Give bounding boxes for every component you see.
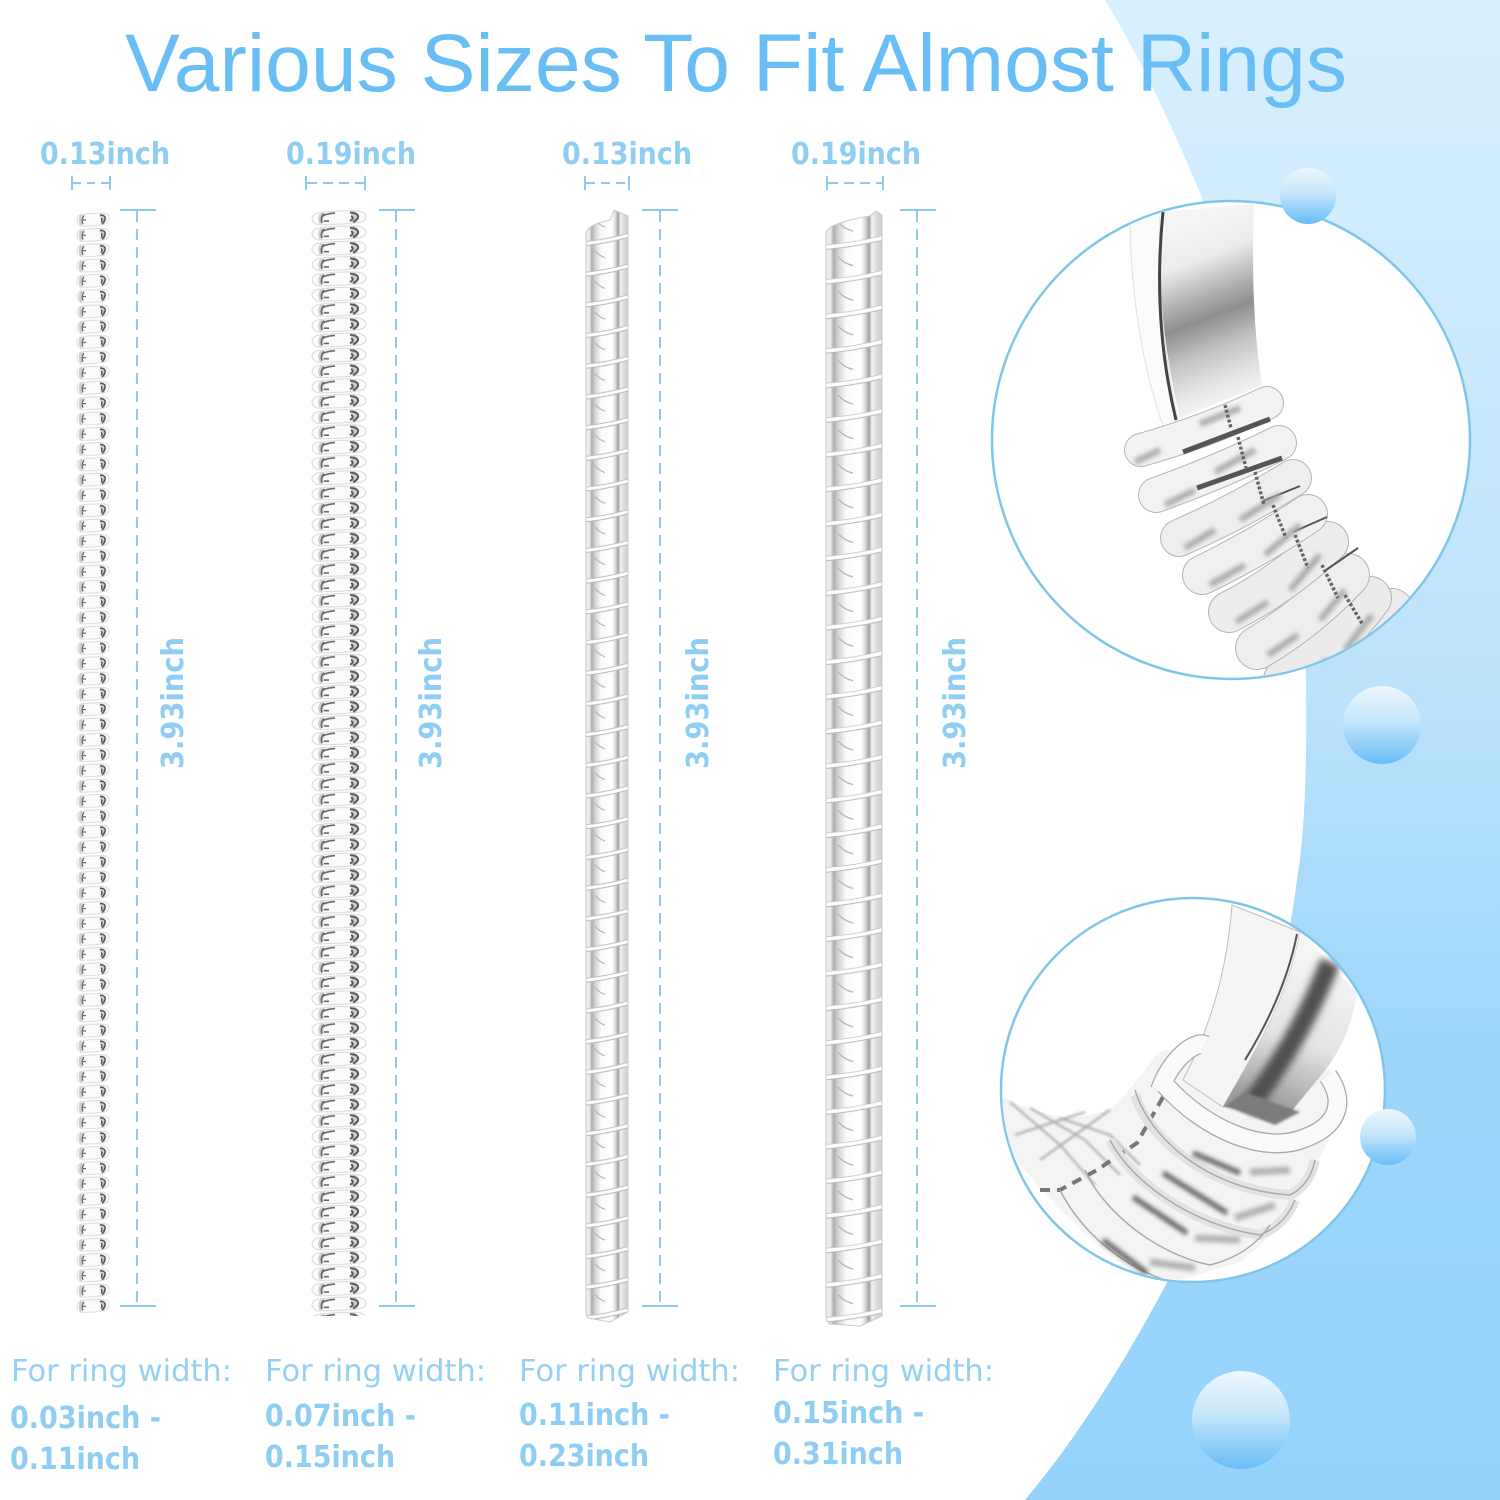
ring width range text bbox=[265, 1354, 486, 1475]
spring: spiral tube 4 bbox=[826, 211, 882, 1326]
ring width range text bbox=[10, 1354, 232, 1477]
ring width range text: For ring width: bbox=[265, 1354, 486, 1389]
width dimension marker bbox=[827, 176, 883, 190]
bubble: bottom bbox=[1192, 1371, 1290, 1469]
ring width range text: 0.07inch - bbox=[265, 1399, 416, 1434]
ring width range text: 0.15inch bbox=[265, 1440, 395, 1475]
ring band bbox=[1130, 204, 1262, 432]
label: length 3.93inch: 3.93inch bbox=[681, 637, 716, 769]
label: coil width 0.13inch: 0.13inch bbox=[562, 137, 692, 172]
width dimension marker bbox=[306, 176, 365, 190]
label: length 3.93inch: 3.93inch bbox=[156, 637, 191, 769]
ring width range text: 0.15inch - bbox=[773, 1396, 924, 1431]
column 2: thick narrow coil spring bbox=[265, 137, 486, 1475]
light blue curved background panel bbox=[1025, 0, 1500, 1500]
ring width range text bbox=[773, 1354, 994, 1472]
ring width range text: 0.31inch bbox=[773, 1437, 903, 1472]
spring coil streaks and seams bbox=[1135, 405, 1372, 690]
column 1: thin narrow coil spring bbox=[10, 137, 232, 1477]
label: coil width 0.19inch: 0.19inch bbox=[791, 137, 921, 172]
length dimension marker bbox=[900, 210, 936, 1306]
ring width range text: For ring width: bbox=[773, 1354, 994, 1389]
length dimension marker bbox=[120, 210, 156, 1306]
bubble: top bbox=[1280, 168, 1336, 224]
ring band bbox=[1183, 905, 1357, 1125]
label: coil width 0.13inch: 0.13inch bbox=[40, 137, 170, 172]
column 4: wide flat spiral tube bbox=[773, 137, 994, 1472]
ring width range text: For ring width: bbox=[519, 1354, 740, 1389]
ring width range text: 0.23inch bbox=[519, 1439, 649, 1474]
ring width range text: 0.03inch - bbox=[10, 1401, 161, 1436]
circle callout: spring on ring, upper bbox=[992, 201, 1470, 710]
label: length 3.93inch: 3.93inch bbox=[414, 637, 449, 769]
ring width range text: 0.11inch bbox=[10, 1442, 140, 1477]
spring tail streaks bbox=[1010, 1097, 1163, 1190]
bubble: lower bbox=[1360, 1109, 1416, 1165]
width dimension marker bbox=[72, 176, 110, 190]
spring coils wrapped around band bbox=[1141, 403, 1392, 710]
spring: spiral tube 3 bbox=[586, 210, 628, 1322]
length dimension marker bbox=[642, 210, 678, 1306]
circle callout: spring on ring, lower bbox=[1001, 898, 1385, 1283]
label: length 3.93inch: 3.93inch bbox=[938, 637, 973, 769]
spring: coil 1 bbox=[76, 212, 110, 1313]
width dimension marker bbox=[585, 176, 629, 190]
spring: coil 2 bbox=[311, 210, 367, 1316]
ring width range text: 0.11inch - bbox=[519, 1398, 670, 1433]
spring body mass bbox=[1002, 1040, 1337, 1283]
title: Various Sizes To Fit Almost Rings bbox=[125, 18, 1347, 109]
dark gaps between coils bbox=[1183, 419, 1358, 570]
label: coil width 0.19inch: 0.19inch bbox=[286, 137, 416, 172]
length dimension marker bbox=[379, 210, 415, 1306]
column 3: narrow flat spiral tube bbox=[519, 137, 740, 1474]
ring width range text bbox=[519, 1354, 740, 1474]
ring width range text: For ring width: bbox=[11, 1354, 232, 1389]
coil contours bbox=[1060, 1044, 1337, 1280]
bubble: middle bbox=[1343, 686, 1421, 764]
